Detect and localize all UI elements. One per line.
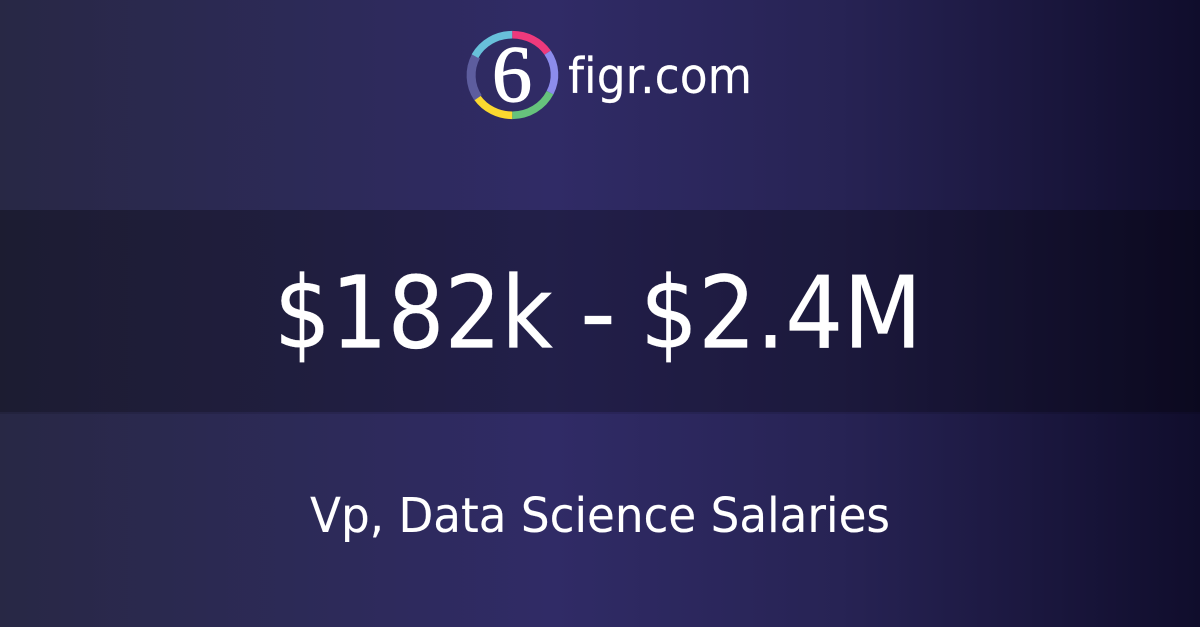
logo ring <box>471 35 554 115</box>
salary range: $2.4M <box>640 254 922 372</box>
logo numeral: 6 <box>492 31 532 119</box>
salary range: - <box>580 254 616 372</box>
logo <box>471 31 752 119</box>
salary band <box>0 210 1200 414</box>
salary range <box>274 254 922 372</box>
logo wordmark: figr.com <box>568 48 752 105</box>
subtitle: Vp, Data Science Salaries <box>310 488 890 544</box>
salary range: $182k <box>274 254 553 372</box>
